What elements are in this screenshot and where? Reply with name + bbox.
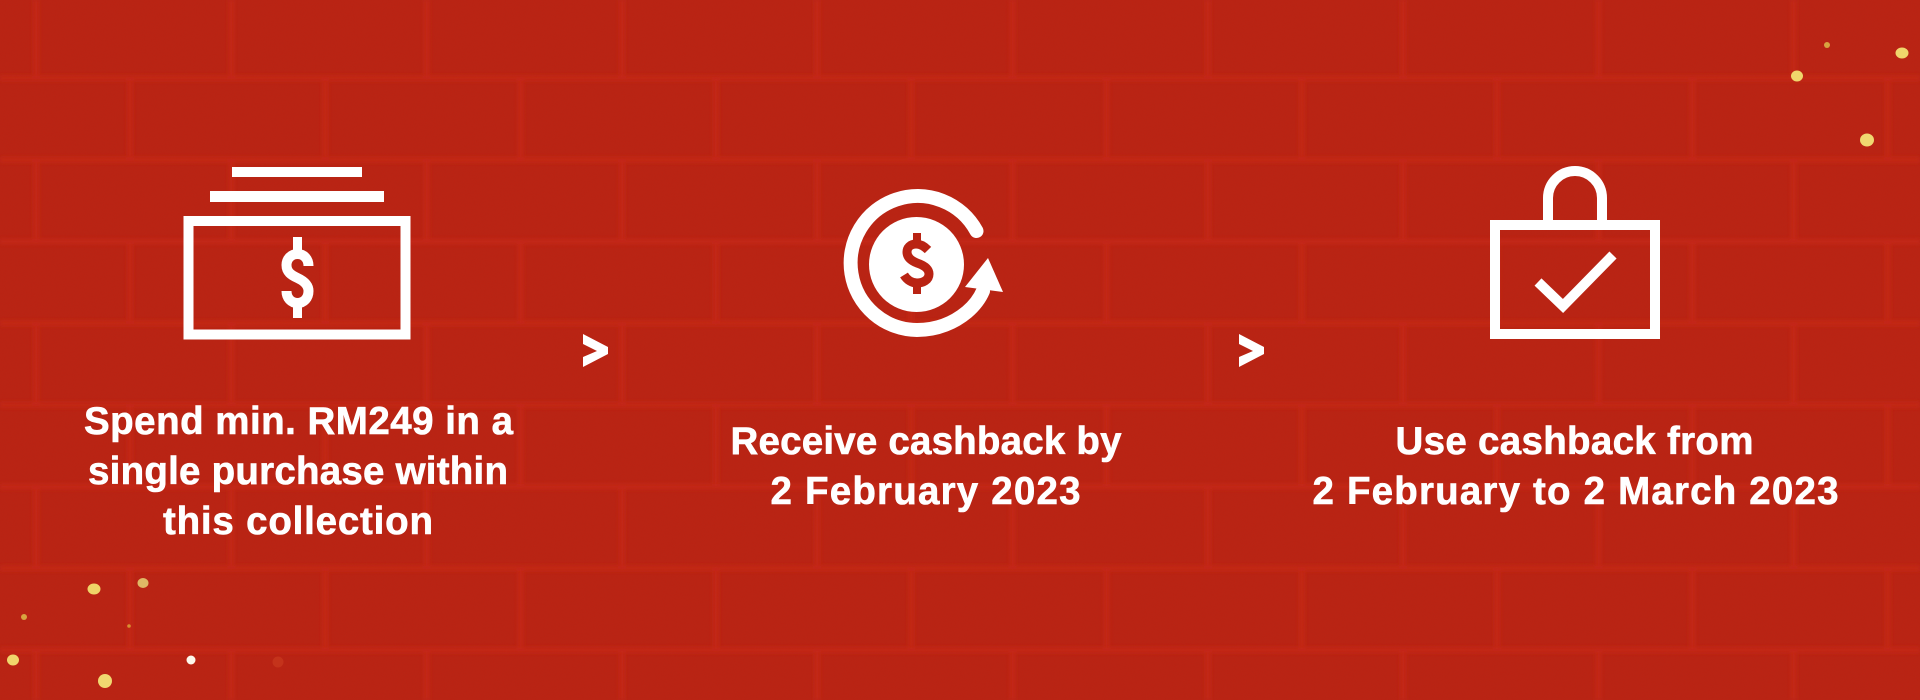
text: use instruction: [1312, 420, 1838, 513]
confetti dots: top right: [1791, 42, 1908, 146]
text: spend instruction: this collection: [163, 500, 433, 543]
confetti dots: bottom left: [7, 578, 284, 688]
panel: use step: [1312, 171, 1838, 513]
text: use instruction: Use cashback from: [1396, 420, 1754, 463]
text: spend instruction: single purchase within: [88, 450, 508, 493]
arrow: step two to three: [1239, 334, 1264, 367]
panel: receive step: [730, 196, 1122, 513]
text: receive instruction: 2 February 2023: [770, 470, 1080, 513]
text: receive instruction: [730, 420, 1122, 513]
text: spend instruction: Spend min. RM249 in a: [84, 400, 514, 443]
panel: spend step: [84, 167, 514, 543]
text: spend instruction: [84, 400, 514, 543]
icon: banknote stack with dollar sign: [188, 167, 406, 334]
arrow: step one to two: [583, 334, 608, 367]
text: use instruction: 2 February to 2 March 2023: [1312, 470, 1838, 513]
icon: circular cashback coin: [851, 196, 1003, 330]
icon: shopping bag with check mark: [1495, 171, 1655, 334]
text: receive instruction: Receive cashback by: [730, 420, 1122, 463]
